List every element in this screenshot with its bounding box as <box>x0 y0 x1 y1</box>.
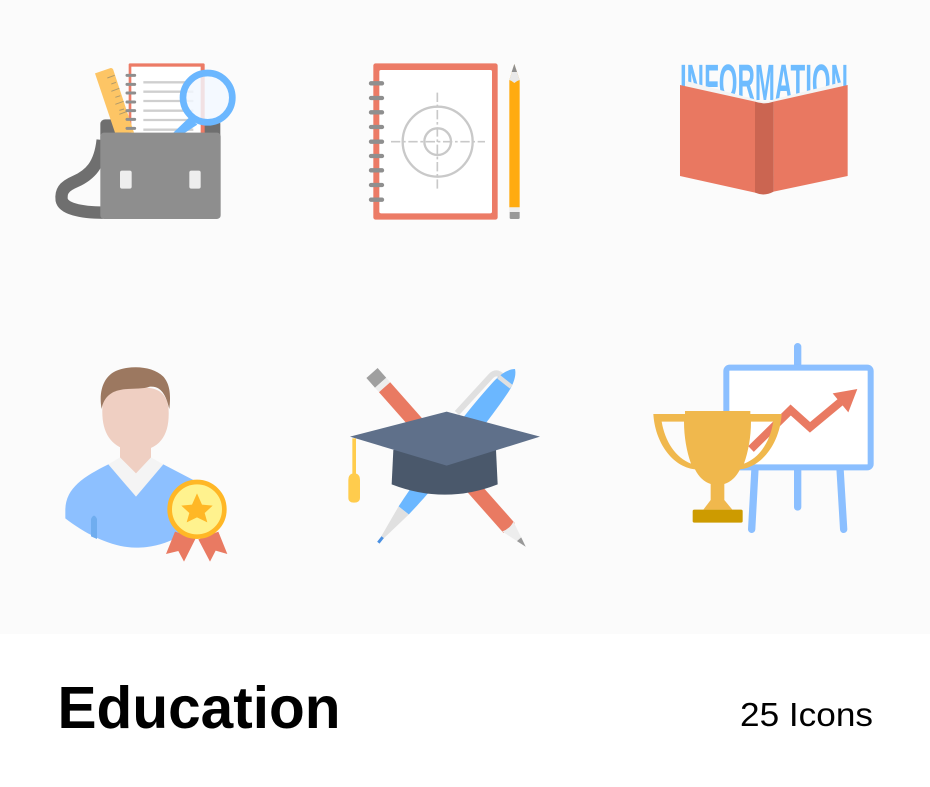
icon: crossed pen <box>370 362 523 549</box>
icon: open book with INFORMATION text <box>680 54 848 194</box>
icon: bag with notebook, ruler and magnifier <box>61 63 232 219</box>
icon count: 25 Icons <box>740 696 873 733</box>
icon: spiral notebook with target and pencil <box>371 63 520 220</box>
icon: graduation cap base <box>392 438 498 495</box>
icon: tassel <box>348 438 360 503</box>
icon: crossed pencil <box>366 368 531 552</box>
icon: graduation cap board <box>350 412 540 466</box>
icon: trophy with presentation board <box>653 347 871 529</box>
icon: student with medal <box>65 367 227 562</box>
title: Education <box>58 675 340 741</box>
icon: graduation cap with crossed pencil and pen <box>348 362 540 552</box>
